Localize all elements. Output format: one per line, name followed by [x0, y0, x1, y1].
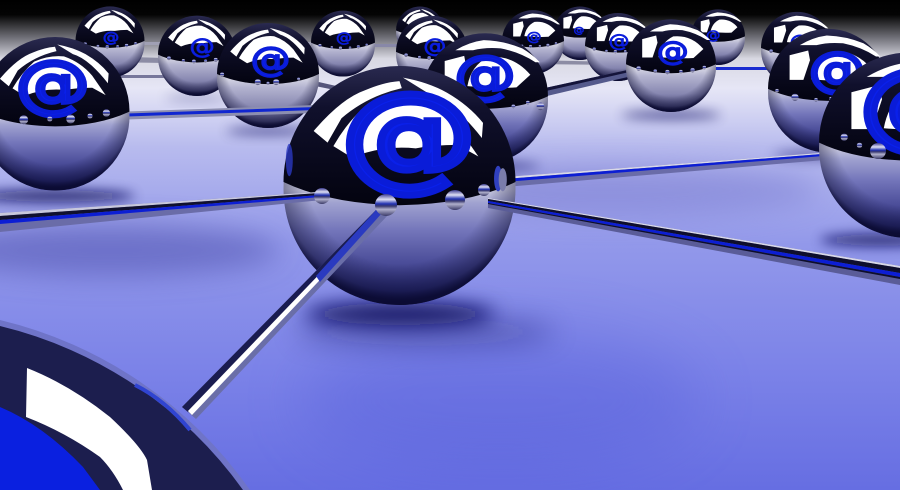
- sphere: back E: @: [336, 30, 352, 46]
- sphere: back M: [585, 13, 651, 81]
- connector ball on right sphere: [870, 143, 886, 159]
- sphere: back P: [761, 12, 833, 86]
- sphere: J behind main: @: [454, 44, 516, 106]
- sphere: middle D: @: [251, 40, 290, 79]
- rod: sphere A to sphere D: [113, 105, 316, 120]
- rod: sphere J to sphere O: [545, 64, 657, 96]
- sphere: back M: @: [609, 31, 629, 52]
- sphere: bottom-left foreground: [0, 320, 250, 490]
- rod: main to right sphere: [505, 149, 872, 187]
- rod: main to right edge: [488, 198, 900, 285]
- sphere: back K: @: [526, 30, 541, 44]
- sphere: back K: [502, 10, 564, 74]
- sphere: back B: [76, 6, 144, 78]
- sphere: back H: [396, 16, 468, 90]
- sphere: middle O: [626, 19, 716, 112]
- rod: main to left: [0, 192, 322, 232]
- sphere: Q right middle: [768, 29, 888, 153]
- sphere: far back L: @: [574, 25, 584, 35]
- sphere: main centre: [284, 66, 516, 305]
- sphere: far back N: @: [706, 29, 720, 43]
- sphere: middle D: [217, 23, 319, 128]
- sphere: R right large: [819, 49, 900, 238]
- rod: sphere D to sphere H: [310, 80, 345, 92]
- sphere: A left large: [0, 37, 130, 190]
- sphere: far back N: [691, 9, 745, 65]
- sphere: back P: @: [790, 32, 810, 52]
- sphere: back C: @: [190, 36, 215, 59]
- sphere: far back L: [554, 6, 606, 60]
- back connecting rods: [100, 42, 780, 78]
- sphere: J behind main: [422, 33, 548, 163]
- sphere shadows: [0, 96, 900, 346]
- sphere: back H: @: [424, 34, 446, 57]
- sphere: main centre: @: [341, 68, 477, 203]
- sphere: Q right middle: @: [809, 42, 865, 98]
- floor shading: [0, 164, 820, 470]
- connector balls on main sphere: [314, 184, 490, 216]
- sphere: middle O: @: [657, 36, 689, 67]
- sphere: back E: [311, 11, 375, 76]
- rod: main to bottom sphere: [182, 208, 388, 419]
- sphere: back B: @: [103, 29, 119, 46]
- sphere: A left large: @: [16, 48, 90, 121]
- sphere: back C: [158, 16, 236, 96]
- sphere: far back G: [396, 7, 444, 56]
